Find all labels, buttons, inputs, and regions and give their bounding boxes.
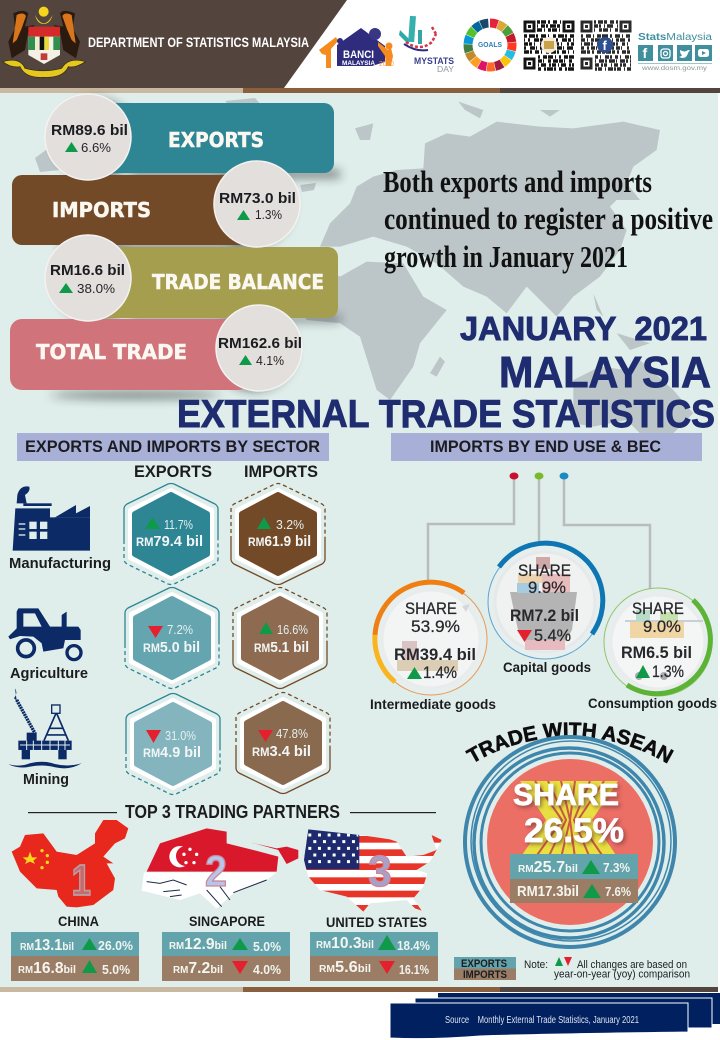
StatsMalaysia social block: www.dosm.gov.my	[641, 65, 708, 72]
bar: total trade	[10, 319, 250, 390]
panel: ASEAN share	[465, 737, 675, 947]
legend: IMPORTS	[463, 969, 507, 981]
panel: ASEAN share: 26.5%	[524, 812, 624, 850]
callout: trade balance value: RM16.6 bil	[50, 262, 125, 279]
legend	[454, 957, 516, 981]
footer: source banner	[390, 993, 720, 1039]
QR code: Facebook	[581, 22, 631, 69]
main title: JANUARY 2021	[460, 310, 707, 347]
note: year-on-year (yoy) comparison	[554, 968, 690, 980]
heading: exports and imports by sector	[17, 433, 329, 461]
table: Singapore	[162, 932, 290, 981]
summary text	[383, 164, 713, 274]
callout: exports value: RM89.6 bil	[51, 122, 128, 139]
label: agriculture: Agriculture	[10, 665, 88, 682]
panel: intermediate goods	[375, 582, 487, 695]
table: United States: RM10.3bil	[316, 935, 374, 952]
table: ASEAN values: RM25.7bil	[518, 859, 578, 876]
table: China: RM16.8bil	[18, 960, 76, 977]
bar: total trade: TOTAL TRADE	[36, 340, 187, 364]
table: China: 26.0%	[98, 938, 133, 953]
table: ASEAN values	[510, 854, 638, 903]
icon: cargo ship watermark	[510, 557, 577, 650]
logo: Banci Malaysia 2020: BANCI	[343, 49, 374, 61]
callout: trade balance value	[45, 235, 131, 321]
hexagon: manufacturing exports: 11.7%	[164, 517, 193, 532]
hexagon: manufacturing exports	[124, 484, 218, 584]
connector tree	[428, 472, 650, 590]
note: Note:	[524, 959, 548, 971]
panel: consumption goods: 1.3%	[652, 662, 684, 681]
hexagon: agriculture imports: RM5.1 bil	[254, 639, 309, 656]
heading: exports and imports by sector: EXPORTS AND IMPORTS BY SECTOR	[25, 437, 320, 456]
hexagon: mining exports: 31.0%	[165, 728, 196, 743]
label: Singapore: SINGAPORE	[189, 913, 265, 929]
panel: capital goods: 9.9%	[528, 578, 566, 597]
panel: intermediate goods: RM39.4 bil	[394, 645, 476, 664]
callout: exports value	[45, 94, 131, 180]
table: ASEAN values: 7.6%	[605, 884, 631, 899]
hexagon: mining imports: RM3.4 bil	[252, 743, 311, 760]
panel: capital goods: SHARE	[518, 561, 571, 580]
logo: Banci Malaysia 2020: 2020	[379, 61, 394, 68]
footer: source banner: Source Monthly External Trade Statistics, January 2021	[445, 1015, 639, 1026]
note: All changes are based on	[577, 959, 687, 971]
heading: imports by end use	[391, 433, 702, 461]
panel: consumption goods	[604, 588, 712, 696]
panel: consumption goods: SHARE	[632, 599, 684, 618]
callout: total trade value: RM162.6 bil	[218, 335, 302, 352]
summary text: growth in January 2021	[384, 239, 628, 274]
bar: imports: IMPORTS	[52, 198, 151, 222]
StatsMalaysia social block	[638, 32, 712, 72]
panel: consumption goods: 9.0%	[643, 617, 681, 636]
bar: imports	[12, 175, 252, 245]
panel: ASEAN share: SHARE	[513, 777, 619, 812]
callout: imports value	[214, 161, 300, 247]
table: United States: 16.1%	[399, 962, 429, 977]
label: manufacturing: Manufacturing	[9, 555, 111, 572]
icon: offshore rig	[8, 688, 82, 768]
map: United States	[302, 828, 443, 913]
icon: Malaysia coat of arms	[3, 7, 86, 77]
footer rule	[0, 987, 718, 992]
logo: MyStats Day: DAY	[437, 65, 455, 74]
panel: capital goods: RM7.2 bil	[510, 606, 579, 625]
heading: top 3 trading partners: TOP 3 TRADING PARTNERS	[125, 802, 340, 822]
hexagon: agriculture imports	[233, 588, 327, 688]
logo: Banci Malaysia 2020: MALAYSIA	[342, 61, 376, 67]
table: ASEAN values: 7.3%	[603, 860, 630, 875]
table: China	[11, 932, 139, 981]
hexagon: mining imports	[236, 692, 330, 794]
hexagon: agriculture imports: 16.6%	[277, 622, 308, 637]
QR code: Facebook: f	[602, 38, 608, 53]
header: left brown band	[0, 0, 347, 88]
hexagon: manufacturing imports	[231, 484, 325, 584]
callout: total trade value	[216, 305, 302, 391]
callout: trade balance value: 38.0%	[77, 281, 115, 296]
table: ASEAN values: RM17.3bil	[517, 883, 579, 900]
panel: capital goods: 5.4%	[534, 626, 571, 645]
bar: trade balance: TRADE BALANCE	[152, 270, 324, 294]
hexagon: manufacturing imports: 3.2%	[276, 517, 304, 532]
table: United States: 18.4%	[397, 938, 430, 953]
heading: trade with ASEAN: TRADE WITH ASEAN	[465, 722, 674, 764]
column headings: EXPORTS	[134, 462, 212, 481]
table: Singapore: 5.0%	[253, 939, 281, 954]
main title: MALAYSIA	[499, 348, 711, 397]
callout: imports value: RM73.0 bil	[219, 190, 296, 207]
map: Singapore: 2	[205, 848, 227, 896]
hexagon: manufacturing exports: RM79.4 bil	[136, 533, 203, 550]
map: China	[12, 820, 128, 907]
bar: trade balance	[90, 247, 338, 318]
table: China: 5.0%	[102, 962, 130, 977]
icon: shopping cart watermark	[625, 610, 703, 680]
header rule	[0, 88, 720, 93]
world map backdrop	[35, 98, 693, 433]
icon: factory	[13, 486, 90, 551]
panel: intermediate goods: SHARE	[405, 599, 457, 618]
heading: imports by end use: IMPORTS BY END USE & BEC	[430, 437, 661, 456]
main title	[177, 310, 715, 436]
table: United States: RM5.6bil	[319, 959, 371, 976]
icon: ASEAN emblem	[520, 781, 618, 858]
legend: EXPORTS	[461, 958, 507, 970]
hexagon: mining imports: 47.8%	[276, 726, 308, 741]
column headings: IMPORTS	[244, 462, 318, 481]
label: capital goods: Capital goods	[503, 659, 591, 675]
StatsMalaysia social block: Stats Malaysia	[638, 32, 712, 43]
StatsMalaysia social block: f	[642, 45, 648, 61]
bar: exports: EXPORTS	[168, 128, 264, 152]
callout: exports value: 6.6%	[81, 140, 111, 155]
drop shadows	[50, 99, 340, 399]
table: Singapore: RM7.2bil	[173, 960, 223, 977]
logo: SDG wheel: GOALS	[478, 42, 502, 49]
table: China: RM13.1bil	[20, 937, 74, 954]
hexagon: manufacturing imports: RM61.9 bil	[248, 533, 311, 550]
panel: consumption goods: RM6.5 bil	[621, 643, 692, 662]
QR code: website	[524, 22, 574, 69]
table: United States	[310, 932, 438, 981]
map: Singapore	[142, 828, 298, 909]
summary text: Both exports and imports	[383, 164, 652, 199]
hexagon: mining exports: RM4.9 bil	[143, 744, 201, 761]
map: United States: 3	[368, 848, 392, 896]
panel: key indicators	[10, 94, 340, 399]
panel: intermediate goods: 53.9%	[411, 617, 460, 636]
column headings	[134, 462, 318, 481]
icon: tractor	[8, 608, 81, 660]
label: United States: UNITED STATES	[326, 914, 427, 930]
icon: factory and boxes watermark	[397, 604, 470, 671]
logo: SDG wheel	[459, 14, 521, 76]
map: China: 1	[72, 857, 91, 905]
label: intermediate goods: Intermediate goods	[370, 696, 496, 712]
panel: capital goods	[488, 543, 603, 659]
hexagon: agriculture exports: RM5.0 bil	[143, 639, 200, 656]
table: Singapore: 4.0%	[253, 962, 281, 977]
hexagon: agriculture exports	[125, 588, 219, 688]
table: Singapore: RM12.9bil	[169, 936, 227, 953]
label: China: CHINA	[58, 913, 99, 929]
panel: intermediate goods: 1.4%	[423, 663, 457, 682]
bar: exports	[90, 103, 334, 173]
header title: DEPARTMENT OF STATISTICS MALAYSIA	[88, 34, 309, 50]
logo: MyStats Day	[399, 16, 455, 74]
hexagon: mining exports	[126, 694, 220, 794]
callout: total trade value: 4.1%	[256, 353, 284, 368]
logo: Banci Malaysia 2020	[319, 28, 394, 68]
hexagon: agriculture exports: 7.2%	[167, 622, 193, 637]
callout: imports value: 1.3%	[255, 207, 282, 222]
note	[524, 957, 690, 980]
label: mining: Mining	[23, 771, 69, 788]
logo: MyStats Day: MYSTATS	[414, 56, 454, 66]
